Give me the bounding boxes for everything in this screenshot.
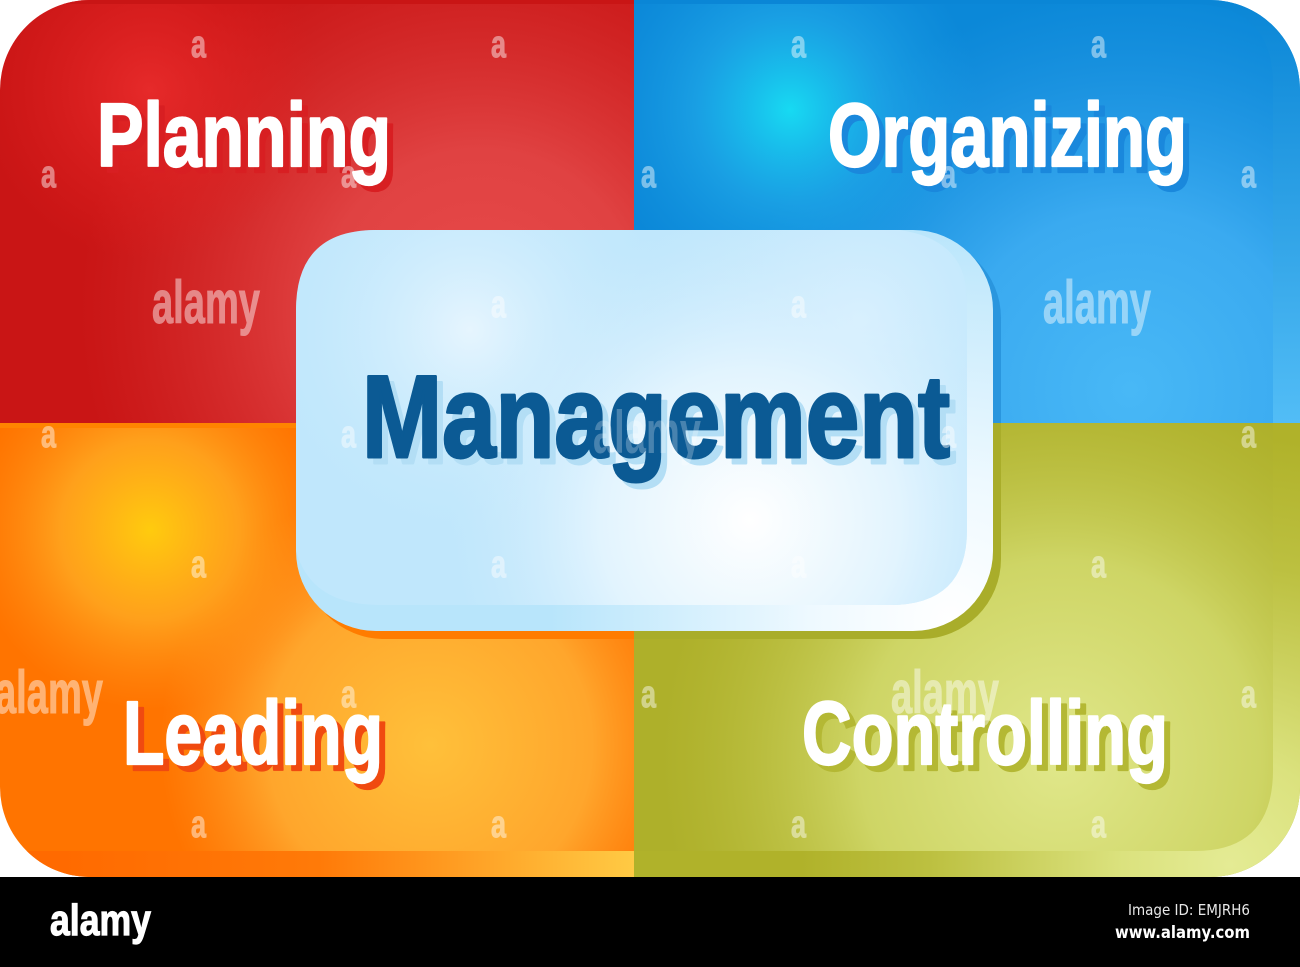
heading: Organizing: Organizing: [834, 92, 1193, 192]
watermark pattern: a: [341, 674, 357, 716]
footer text: website: www.alamy.com: [1115, 923, 1250, 942]
watermark pattern: a: [1091, 24, 1107, 66]
heading: Leading: Leading: [123, 684, 383, 784]
watermark pattern: a: [791, 284, 807, 326]
watermark pattern: alamy: [1043, 269, 1151, 336]
watermark pattern: a: [1091, 544, 1107, 586]
watermark pattern: a: [491, 544, 507, 586]
heading: Management: Management: [368, 357, 956, 488]
watermark pattern: a: [791, 24, 807, 66]
watermark pattern: alamy: [152, 269, 260, 336]
heading: Controlling: Controlling: [802, 684, 1168, 784]
watermark pattern: a: [791, 544, 807, 586]
watermark pattern: a: [191, 804, 207, 846]
watermark pattern: a: [491, 284, 507, 326]
watermark pattern: a: [491, 804, 507, 846]
watermark pattern: alamy: [891, 659, 999, 726]
watermark pattern: a: [641, 674, 657, 716]
watermark pattern: a: [791, 804, 807, 846]
heading: Planning: Planning: [97, 86, 391, 186]
heading: Organizing: Organizing: [828, 86, 1187, 186]
panel: Controlling green quadrant: [634, 423, 1300, 877]
watermark pattern: a: [41, 414, 57, 456]
panel: Leading orange quadrant: [0, 423, 634, 877]
watermark pattern: a: [1241, 154, 1257, 196]
watermark pattern: a: [1091, 804, 1107, 846]
panel: Organizing blue quadrant: [634, 0, 1300, 423]
panel: Planning red quadrant: [0, 0, 634, 423]
watermark pattern: a: [191, 544, 207, 586]
watermark pattern: a: [641, 154, 657, 196]
watermark over Management heading: alamy: [593, 399, 701, 466]
footer bar: [0, 877, 1300, 967]
watermark pattern: a: [491, 24, 507, 66]
watermark pattern: a: [341, 154, 357, 196]
heading: Leading: Leading: [129, 690, 389, 790]
panel: central Management box shadow: [304, 238, 1001, 639]
panel: central Management box: [296, 230, 993, 631]
footer logo: alamy: alamy: [50, 896, 151, 945]
watermark pattern: a: [341, 414, 357, 456]
watermark pattern: a: [1241, 414, 1257, 456]
heading: Controlling: Controlling: [808, 690, 1174, 790]
watermark pattern: alamy: [0, 659, 103, 726]
watermark pattern: a: [941, 414, 957, 456]
heading: Management: Management: [362, 351, 950, 482]
footer text: image ID: Image ID: EMJRH6: [1128, 901, 1250, 919]
heading: Planning: Planning: [103, 92, 397, 192]
watermark pattern: a: [1241, 674, 1257, 716]
watermark pattern: a: [941, 154, 957, 196]
watermark pattern: a: [191, 24, 207, 66]
watermark pattern: a: [41, 154, 57, 196]
